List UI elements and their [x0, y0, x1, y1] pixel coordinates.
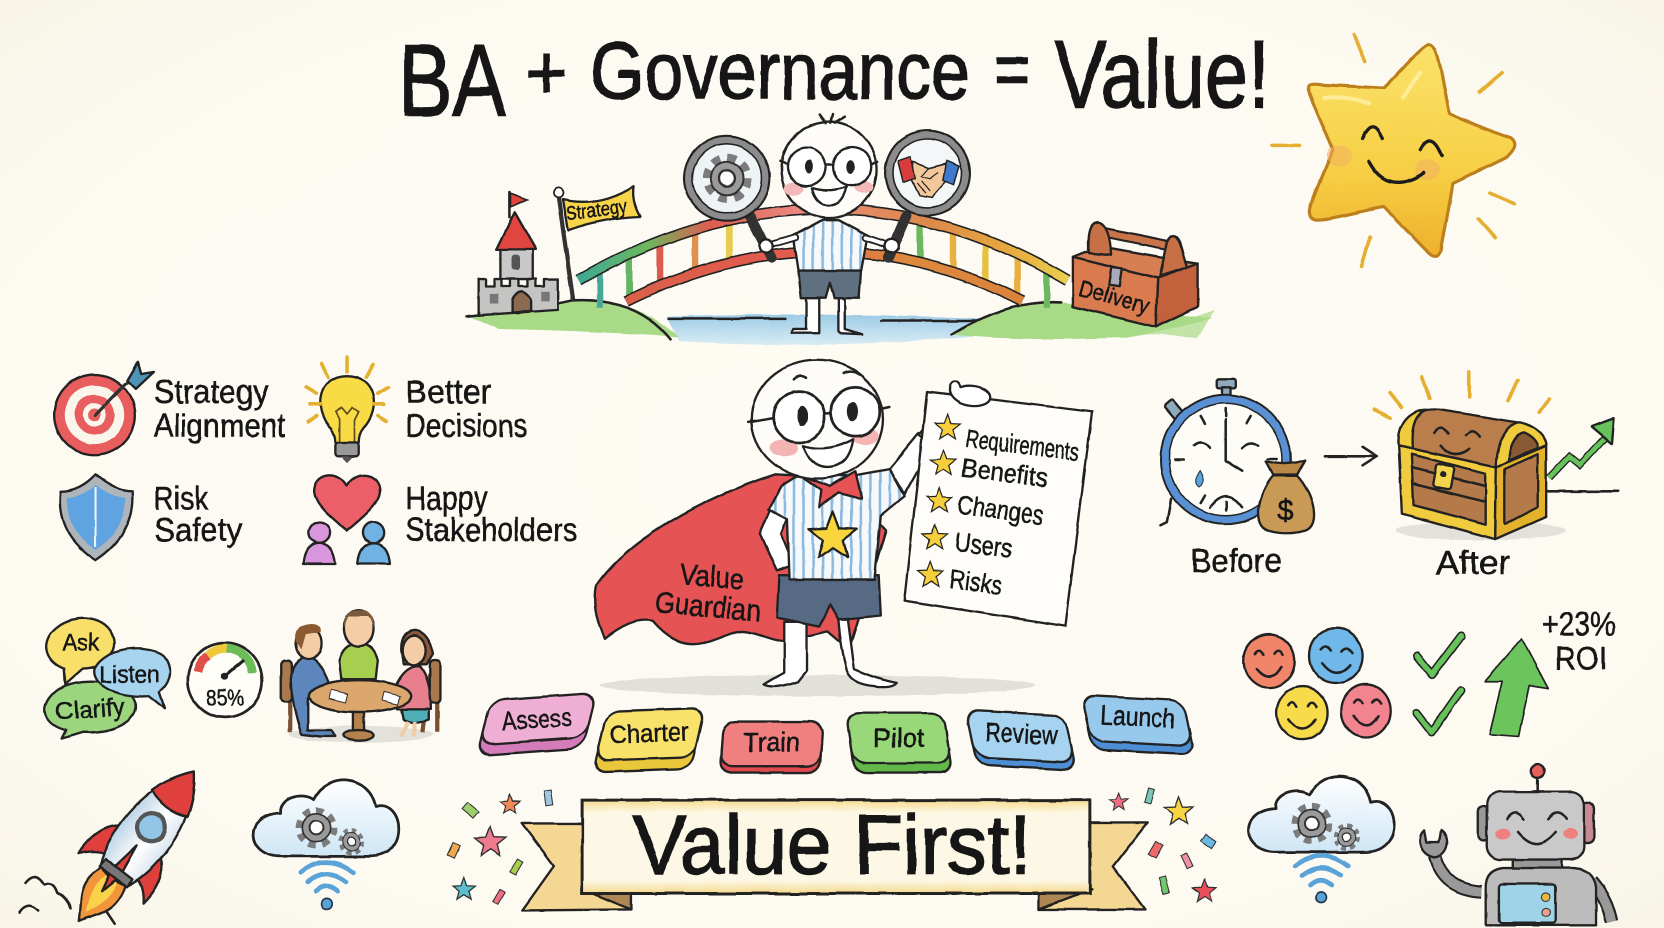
smiley: coral	[1244, 635, 1295, 688]
cape: Guardian	[654, 586, 762, 628]
title: Value!	[1054, 22, 1270, 128]
gauge 85%: 85%	[206, 686, 244, 711]
benefit: strategy alignment: Alignment	[154, 407, 285, 444]
person: left	[291, 624, 335, 736]
benefit: better decisions: Decisions	[405, 407, 527, 444]
green hills and water	[467, 300, 1212, 345]
growth arrow	[1547, 418, 1618, 491]
step: launch: Launch	[1100, 700, 1176, 734]
left ribbon fold	[583, 889, 631, 909]
step: train	[720, 722, 823, 773]
Strategy flag: Strategy	[564, 195, 629, 226]
item: users: Users	[953, 527, 1014, 564]
raised arm	[889, 433, 932, 495]
item: requirements	[935, 414, 1081, 467]
bubble: ask: Ask	[62, 630, 100, 657]
magnifier: gear	[684, 136, 772, 258]
money bag	[1259, 461, 1314, 533]
robot arm raised	[1435, 855, 1481, 891]
step: pilot: Pilot	[873, 723, 925, 753]
benefit: risk safety	[60, 474, 243, 560]
benefit: risk safety: Risk	[154, 479, 209, 516]
right ribbon fold	[1039, 889, 1092, 909]
rays	[1374, 371, 1549, 418]
step: review	[963, 710, 1079, 770]
step: launch	[1078, 695, 1197, 754]
confetti right	[1109, 788, 1216, 901]
magnifier: handshake	[885, 131, 970, 258]
benefit: strategy alignment	[54, 362, 285, 455]
step: assess: Assess	[501, 704, 573, 736]
head	[748, 360, 889, 479]
benefit: happy stakeholders: Happy	[405, 479, 489, 516]
process steps row	[473, 693, 1197, 773]
step: review: Review	[984, 717, 1059, 751]
banner panel	[583, 800, 1090, 894]
icon: rocket	[19, 746, 227, 928]
title: BA	[398, 24, 506, 138]
title: Governance	[590, 27, 970, 117]
meeting around table	[281, 610, 440, 743]
item: users	[922, 525, 1014, 564]
person: middle	[340, 610, 378, 679]
item: changes: Changes	[955, 490, 1045, 530]
cape	[595, 474, 886, 649]
smiley faces group	[1244, 628, 1390, 740]
step: train: Train	[743, 727, 800, 757]
BA character with magnifiers	[684, 115, 970, 334]
cloud gears and wifi, left	[253, 780, 399, 909]
icon: robot	[1420, 764, 1612, 925]
benefit icons grid	[54, 357, 577, 563]
left ribbon tail	[522, 823, 631, 910]
cloud gears and wifi, right	[1248, 776, 1394, 903]
item: benefits	[931, 450, 1050, 493]
item: benefits: Benefits	[960, 453, 1050, 493]
rainbow bridge	[578, 209, 1068, 308]
step: charter: Charter	[609, 718, 690, 749]
toolbox labelled Delivery: Delivery	[1076, 276, 1153, 319]
benefit: better decisions: Better	[405, 373, 491, 410]
ROI up arrow and label: +23%	[1542, 606, 1615, 643]
smiley: blue	[1310, 628, 1363, 683]
confetti left	[448, 790, 554, 904]
benefit: happy stakeholders: Stakeholders	[405, 511, 577, 548]
hero: value guardian	[595, 360, 1035, 696]
toolbox labelled Delivery	[1073, 223, 1215, 337]
step: assess	[473, 693, 600, 756]
before: sad clock and money bag	[1161, 379, 1314, 579]
ROI up arrow and label: ROI	[1555, 640, 1608, 677]
treasure chest	[1399, 409, 1546, 539]
after: happy treasure chest and growth	[1374, 371, 1618, 581]
gauge 85%	[188, 643, 262, 717]
ROI up arrow and label	[1485, 606, 1615, 736]
value first banner	[522, 797, 1148, 910]
item: requirements: Requirements	[964, 425, 1081, 467]
castle	[479, 192, 558, 315]
item: risks: Risks	[948, 564, 1004, 600]
robot arm lowered	[1592, 881, 1612, 921]
smiley: pink	[1341, 684, 1390, 738]
benefit: happy stakeholders	[304, 475, 577, 563]
benefit: better decisions	[306, 357, 527, 463]
bridge scene	[467, 115, 1215, 345]
smiley: yellow	[1277, 687, 1328, 740]
Strategy flag	[553, 186, 640, 299]
speech bubbles: ask listen clarify	[45, 618, 170, 739]
cape: Value	[679, 558, 745, 597]
table	[309, 680, 411, 741]
clipboard checklist	[904, 381, 1092, 626]
bubble: listen: Listen	[99, 661, 160, 688]
benefit: risk safety: Safety	[154, 511, 243, 548]
smoke trail	[19, 877, 115, 923]
person: right	[395, 630, 433, 736]
icon: smiling star	[1272, 35, 1515, 266]
arrow: before to after	[1324, 447, 1377, 466]
chest star	[809, 511, 857, 558]
item: changes	[927, 488, 1045, 530]
title: +	[525, 31, 568, 116]
step: charter	[591, 708, 707, 772]
title: =	[994, 28, 1030, 113]
banner text: Value First!	[632, 797, 1032, 891]
step: pilot	[846, 713, 952, 773]
bubble: clarify: Clarify	[54, 694, 127, 726]
money bag: $	[1277, 494, 1294, 527]
label: before: Before	[1191, 542, 1282, 579]
benefit: strategy alignment: Strategy	[154, 373, 269, 410]
item: risks	[918, 562, 1004, 600]
right ribbon tail	[1039, 822, 1148, 909]
check marks	[1417, 636, 1461, 732]
label: after: After	[1436, 544, 1510, 581]
title	[398, 22, 1270, 138]
sad stopwatch	[1161, 379, 1290, 525]
